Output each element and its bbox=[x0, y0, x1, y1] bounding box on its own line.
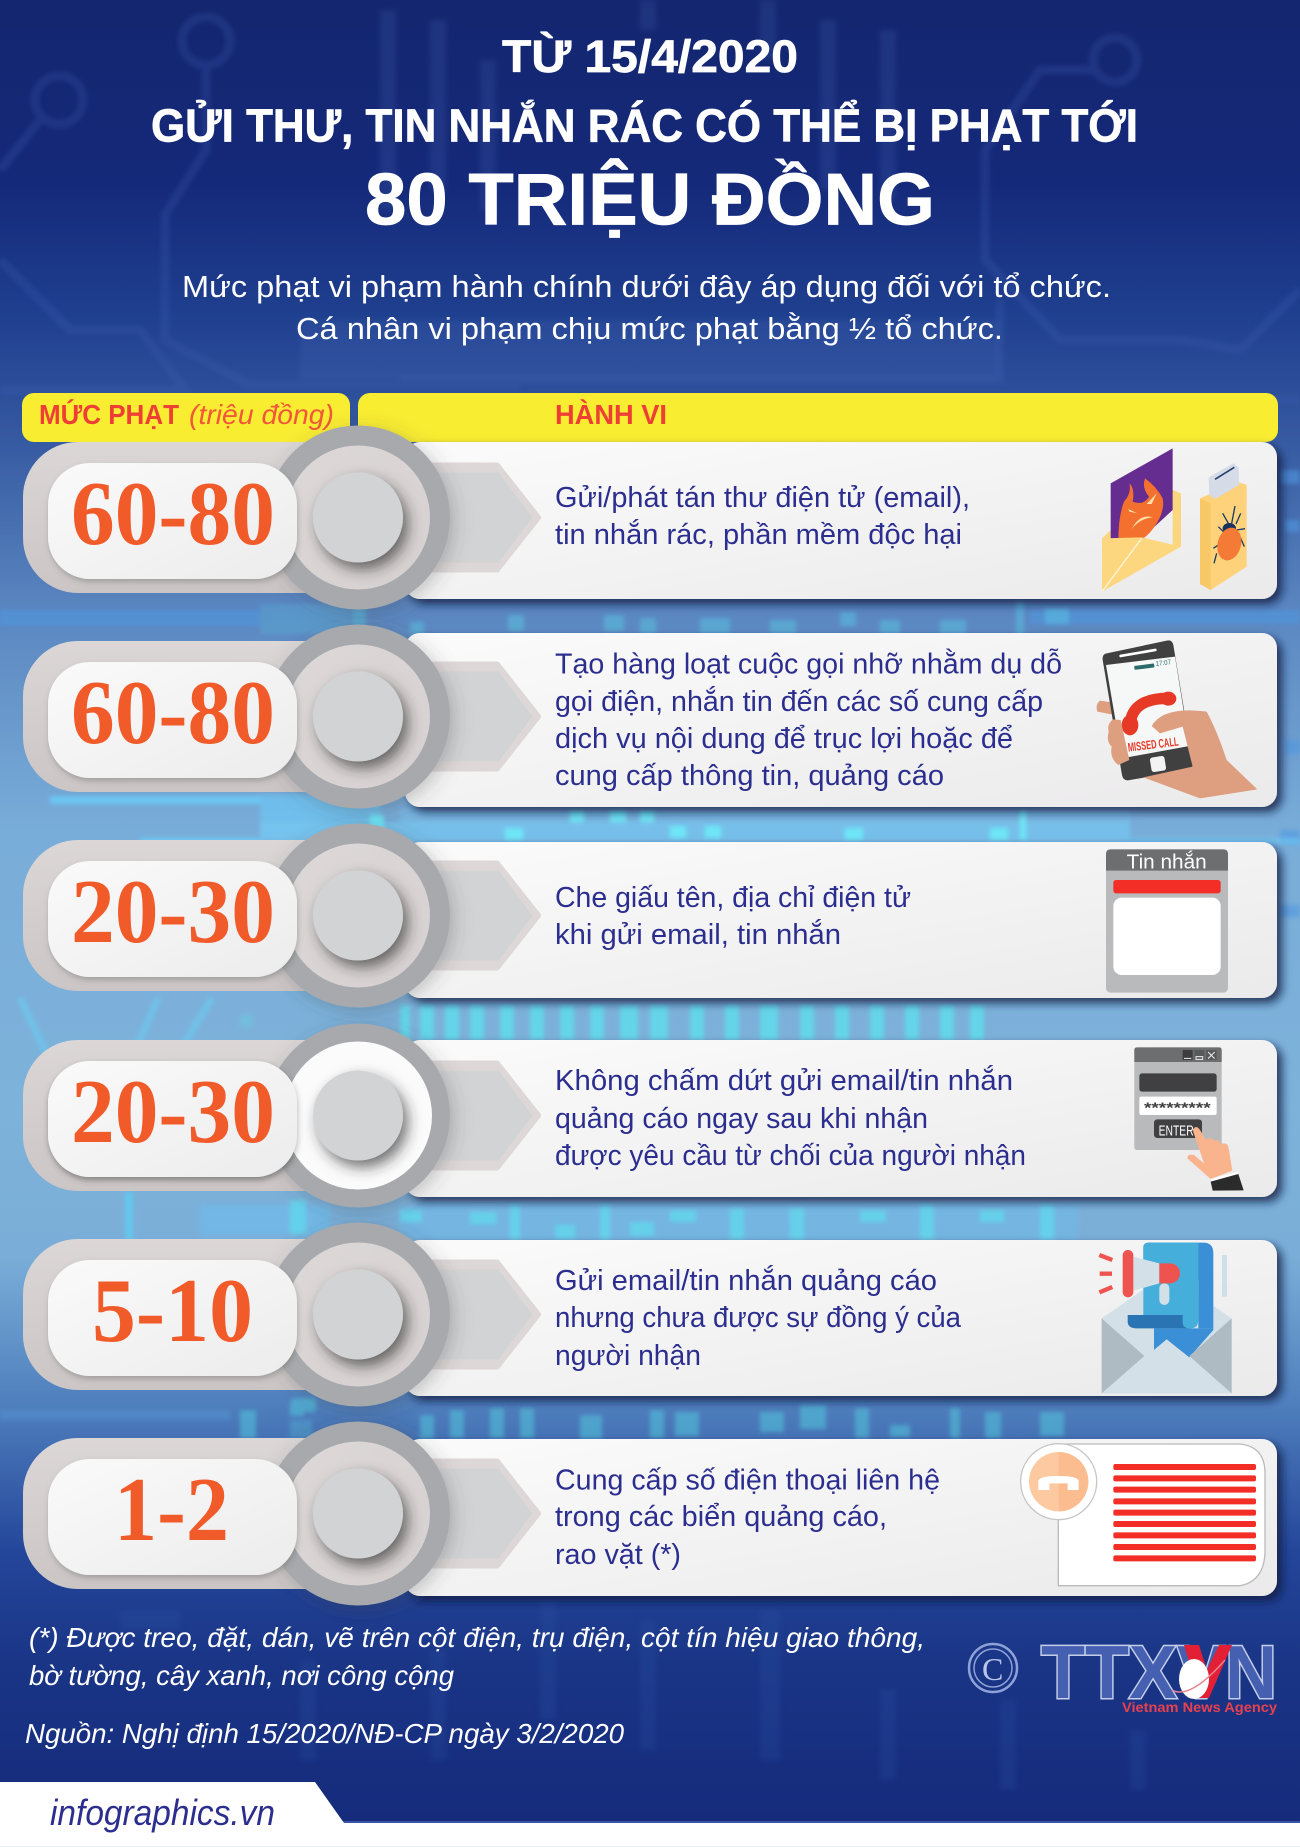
behaviour text 4: quảng cáo ngay sau khi nhận bbox=[555, 1103, 928, 1135]
behaviour text 1: Gửi/phát tán thư điện tử (email), bbox=[555, 482, 970, 514]
header: penalty column bbox=[22, 393, 350, 442]
behaviour text 6: Cung cấp số điện thoại liên hệ bbox=[555, 1464, 940, 1496]
penalty control 5 bbox=[23, 1222, 538, 1406]
title: TỪ 15/4/2020 bbox=[502, 31, 798, 82]
footnote: bờ tường, cây xanh, nơi công cộng bbox=[29, 1660, 454, 1691]
title: GỬI THƯ, TIN NHẮN RÁC CÓ THỂ BỊ PHẠT TỚI bbox=[151, 100, 1138, 152]
icon: advertising email with megaphone bbox=[1099, 1243, 1232, 1393]
card 4 bbox=[405, 1040, 1277, 1197]
subtitle: Mức phạt vi phạm hành chính dưới đây áp dụng đối với tổ chức. bbox=[182, 269, 1111, 304]
icon: message window: Tin nhắn bbox=[1127, 850, 1207, 873]
icon: missed call phone in hand bbox=[1097, 640, 1257, 798]
gap texture row 3-4 bbox=[240, 1005, 984, 1040]
gap texture row 5-6 bbox=[0, 1398, 1064, 1439]
icon: login window with pointing hand: ********* bbox=[1144, 1101, 1211, 1117]
behaviour text 1: tin nhắn rác, phần mềm độc hại bbox=[555, 519, 962, 551]
row 4 bbox=[23, 1024, 1277, 1208]
behaviour text 5: người nhận bbox=[555, 1340, 701, 1372]
card 5 bbox=[405, 1240, 1277, 1396]
website: infographics.vn bbox=[50, 1792, 275, 1833]
card 3 bbox=[405, 842, 1277, 998]
gap texture row 1-2 bbox=[260, 600, 1069, 640]
icon: missed call phone in hand: 17:07 bbox=[1155, 659, 1172, 668]
header: behaviour column: HÀNH VI bbox=[555, 399, 667, 430]
row 1 bbox=[23, 426, 1277, 610]
behaviour text 3 bbox=[555, 882, 911, 951]
subtitle bbox=[182, 269, 1111, 346]
icon: malware envelope and infected usb bbox=[1102, 448, 1247, 592]
behaviour text 6: rao vặt (*) bbox=[555, 1539, 681, 1571]
header: behaviour column bbox=[358, 393, 1278, 442]
behaviour text 3: khi gửi email, tin nhắn bbox=[555, 919, 841, 951]
active ring bbox=[48, 1042, 432, 1190]
subtitle: Cá nhân vi phạm chịu mức phạt bằng ½ tổ chức. bbox=[296, 311, 1003, 346]
penalty 60-80: 60-80 bbox=[71, 662, 275, 763]
icon: login window with pointing hand: ENTER bbox=[1159, 1124, 1194, 1140]
penalty control 1 bbox=[23, 426, 538, 610]
title bbox=[151, 31, 1138, 240]
penalty 60-80: 60-80 bbox=[71, 463, 275, 564]
behaviour text 2: dịch vụ nội dung để trục lợi hoặc để bbox=[555, 723, 1013, 755]
gap texture row 4-5 bbox=[125, 1192, 1078, 1240]
icon: login window with pointing hand bbox=[1134, 1047, 1244, 1191]
penalty 20-30: 20-30 bbox=[71, 861, 275, 962]
penalty control 6 bbox=[23, 1422, 538, 1606]
source: Nguồn: Nghị định 15/2020/NĐ-CP ngày 3/2/2020 bbox=[25, 1718, 624, 1749]
behaviour text 5: Gửi email/tin nhắn quảng cáo bbox=[555, 1265, 937, 1297]
behaviour text 5 bbox=[555, 1265, 961, 1372]
behaviour text 4: Không chấm dứt gửi email/tin nhắn bbox=[555, 1065, 1013, 1097]
behaviour text 2: Tạo hàng loạt cuộc gọi nhỡ nhằm dụ dỗ bbox=[555, 648, 1062, 680]
penalty 20-30: 20-30 bbox=[71, 1061, 275, 1162]
behaviour text 4 bbox=[555, 1065, 1026, 1172]
behaviour text 1 bbox=[555, 482, 970, 551]
row 3 bbox=[23, 824, 1277, 1008]
behaviour text 6: trong các biển quảng cáo, bbox=[555, 1501, 887, 1533]
footer band bbox=[0, 1782, 1300, 1847]
behaviour text 2: cung cấp thông tin, quảng cáo bbox=[555, 760, 944, 792]
title: 80 TRIỆU ĐỒNG bbox=[365, 160, 935, 240]
card 2 bbox=[405, 633, 1277, 807]
penalty control 3 bbox=[23, 824, 538, 1008]
row 5 bbox=[23, 1222, 1277, 1406]
header: penalty column: MỨC PHẠT bbox=[39, 399, 179, 430]
footnote bbox=[29, 1622, 925, 1691]
logo: TTXVN: C bbox=[982, 1651, 1003, 1687]
penalty control 4 bbox=[23, 1024, 538, 1208]
penalty 5-10: 5-10 bbox=[92, 1260, 253, 1361]
behaviour text 4: được yêu cầu từ chối của người nhận bbox=[555, 1140, 1026, 1172]
behaviour text 3: Che giấu tên, địa chỉ điện tử bbox=[555, 882, 911, 914]
logo: TTXVN: TTXVN bbox=[1041, 1630, 1277, 1714]
icon: message window bbox=[1106, 849, 1228, 993]
behaviour text 5: nhưng chưa được sự đồng ý của bbox=[555, 1302, 961, 1334]
penalty control 2 bbox=[23, 624, 538, 808]
gap texture row 2-3 bbox=[50, 795, 1300, 844]
card 1 bbox=[405, 442, 1277, 599]
behaviour text 6 bbox=[555, 1464, 940, 1571]
row 6 bbox=[23, 1422, 1277, 1606]
footnote: (*) Được treo, đặt, dán, vẽ trên cột điện, trụ điện, cột tín hiệu giao thông, bbox=[29, 1622, 925, 1653]
header: penalty column: (triệu đồng) bbox=[189, 399, 334, 430]
card 6 bbox=[405, 1439, 1277, 1596]
penalty 1-2: 1-2 bbox=[114, 1459, 229, 1560]
icon: advertising notice with phone bbox=[1021, 1444, 1265, 1586]
row 2 bbox=[23, 624, 1277, 808]
logo: TTXVN: Vietnam News Agency bbox=[1122, 1699, 1277, 1715]
behaviour text 2: gọi điện, nhắn tin đến các số cung cấp bbox=[555, 686, 1043, 718]
icon: missed call phone in hand: MISSED CALL bbox=[1127, 734, 1180, 755]
behaviour text 2 bbox=[555, 648, 1062, 792]
